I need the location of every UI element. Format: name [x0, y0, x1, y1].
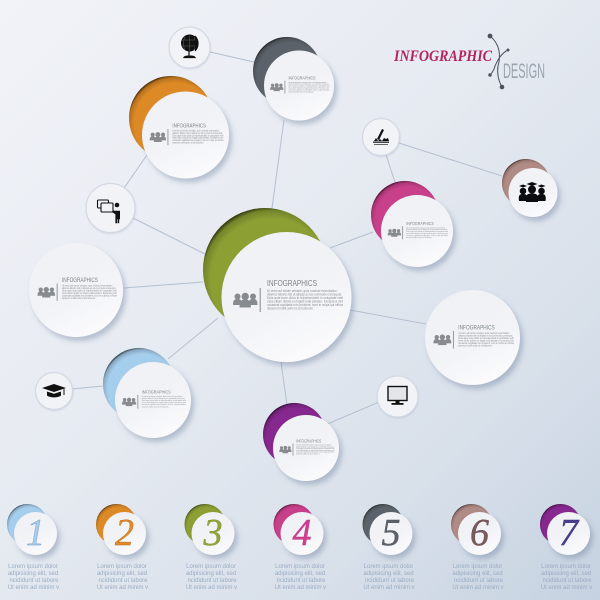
step 1: [7, 504, 59, 591]
panel: grey circle: [253, 37, 334, 120]
step 4: adipisicing elit, sed: [275, 571, 325, 577]
step 7: [540, 504, 592, 591]
panel: right white circle: INFOGRAPHICS: [458, 324, 495, 331]
icon: globe: [169, 27, 210, 68]
panel: orange circle: INFOGRAPHICS: [172, 124, 206, 130]
title: infographic design: INFOGRAPHIC: [393, 48, 493, 65]
icon: graduation cap: [36, 372, 72, 410]
panel: pink circle: occaecat cupidatat non proident, sunt in culpa qui officia: [406, 234, 448, 237]
panel: purple circle: INFOGRAPHICS: [296, 438, 321, 444]
panel: grey circle: deserunt mollit anim id est laborum.: [288, 90, 314, 93]
step 2: [96, 504, 148, 591]
panel: green centre circle: [203, 208, 352, 362]
panel: orange circle: deserunt mollit anim id est laborum.: [172, 141, 204, 144]
step 6: Ut enim ad minim v: [452, 585, 504, 591]
icon: presenter with slides: [86, 184, 135, 232]
panel: green centre circle: deserunt mollit anim id est laborum.: [267, 306, 314, 310]
icon: pen and chart: [362, 118, 400, 156]
step 2: Lorem ipsum dolor: [97, 564, 147, 570]
panel: left white circle: Ut enim ad minim veniam, quis nostrud exercitation: [62, 284, 113, 287]
step 3: adipisicing elit, sed: [186, 571, 236, 577]
panel: purple circle: [263, 403, 339, 481]
panel: blue circle: deserunt mollit anim id est laborum.: [142, 405, 169, 408]
title: infographic design: DESIGN: [503, 60, 545, 83]
panel: blue circle: occaecat cupidatat non proident, sunt in culpa qui officia: [142, 403, 187, 406]
step 3: ncididunt ut labore: [187, 578, 237, 584]
step 7: ncididunt ut labore: [542, 578, 592, 584]
panel: orange circle: ullamco laboris nisi ut aliquip ex ea commodo consequat.: [172, 132, 223, 135]
panel: blue circle: INFOGRAPHICS: [142, 390, 171, 396]
panel: purple circle: esse cillum dolore eu fugiat nulla pariatur. Excepteur sint: [296, 449, 335, 452]
step 7: Lorem ipsum dolor: [541, 564, 591, 570]
panel: right white circle: ullamco laboris nisi ut aliquip ex ea commodo consequat.: [458, 334, 513, 337]
step 1: 1: [26, 512, 45, 554]
step 7: Ut enim ad minim v: [541, 585, 592, 591]
panel: purple circle: Ut enim ad minim veniam, quis nostrud exercitation: [296, 444, 331, 446]
step 5: Lorem ipsum dolor: [364, 564, 413, 570]
step 3: 3: [202, 512, 222, 554]
panel: grey circle: INFOGRAPHICS: [288, 76, 315, 81]
panel: green centre circle: occaecat cupidatat non proident, sunt in culpa qui officia: [267, 303, 343, 307]
panel: green centre circle: esse cillum dolore eu fugiat nulla pariatur. Excepteur sint: [267, 300, 343, 304]
panel: grey circle: esse cillum dolore eu fugiat nulla pariatur. Excepteur sint: [288, 86, 330, 89]
panel: pink circle: INFOGRAPHICS: [406, 221, 434, 227]
panel: grey circle: Duis aute irure dolor in reprehenderit in voluptate velit: [288, 85, 330, 88]
panel: left white circle: Duis aute irure dolor in reprehenderit in voluptate velit: [62, 289, 117, 292]
step 5: [362, 504, 415, 591]
step 7: 7: [559, 512, 580, 554]
step 7: adipisicing elit, sed: [541, 571, 591, 577]
panel: purple circle: Duis aute irure dolor in reprehenderit in voluptate velit: [296, 447, 335, 450]
step 6: adipisicing elit, sed: [452, 571, 503, 577]
panel: pink circle: deserunt mollit anim id est laborum.: [406, 236, 433, 239]
panel: grey circle: occaecat cupidatat non proident, sunt in culpa qui officia: [288, 88, 330, 91]
panel: left white circle: deserunt mollit anim id est laborum.: [62, 297, 96, 300]
step 2: 2: [115, 512, 134, 554]
panel: left white circle: occaecat cupidatat non proident, sunt in culpa qui officia: [62, 294, 117, 297]
step 1: Lorem ipsum dolor: [8, 564, 58, 570]
step 5: adipisicing elit, sed: [363, 571, 414, 577]
step 5: Ut enim ad minim v: [363, 585, 415, 591]
step 2: Ut enim ad minim v: [97, 585, 148, 591]
panel: blue circle: esse cillum dolore eu fugiat nulla pariatur. Excepteur sint: [142, 401, 186, 404]
step 6: 6: [470, 512, 489, 554]
connector lines: [72, 52, 502, 425]
panel: right white circle: esse cillum dolore eu fugiat nulla pariatur. Excepteur sint: [458, 340, 514, 343]
panel: orange circle: Duis aute irure dolor in reprehenderit in voluptate velit: [172, 134, 224, 137]
panel: blue circle: Duis aute irure dolor in reprehenderit in voluptate velit: [142, 399, 186, 402]
panel: pink circle: Ut enim ad minim veniam, quis nostrud exercitation: [406, 226, 445, 229]
step 6: [451, 504, 504, 591]
panel: pink circle: [371, 181, 453, 267]
step 3: [184, 504, 237, 591]
panel: right white circle: Ut enim ad minim veniam, quis nostrud exercitation: [458, 332, 510, 335]
panel: blue circle: ullamco laboris nisi ut aliquip ex ea commodo consequat.: [142, 397, 186, 400]
panel: orange circle: Ut enim ad minim veniam, quis nostrud exercitation: [172, 130, 220, 133]
step 5: 5: [382, 512, 400, 554]
step 4: ncididunt ut labore: [276, 578, 326, 584]
panel: orange circle: occaecat cupidatat non proident, sunt in culpa qui officia: [172, 139, 224, 142]
panel: green centre circle: Duis aute irure dolor in reprehenderit in voluptate velit: [267, 296, 343, 300]
step 2: ncididunt ut labore: [98, 578, 148, 584]
panel: pink circle: Duis aute irure dolor in reprehenderit in voluptate velit: [406, 230, 449, 233]
step 1: ncididunt ut labore: [9, 578, 59, 584]
step 1: Ut enim ad minim v: [8, 585, 59, 591]
panel: orange circle: [129, 76, 229, 178]
panel: left white circle: ullamco laboris nisi ut aliquip ex ea commodo consequat.: [62, 287, 116, 290]
step 6: ncididunt ut labore: [454, 578, 504, 584]
step 1: adipisicing elit, sed: [8, 571, 58, 577]
icon: monitor: [377, 376, 418, 417]
step 2: adipisicing elit, sed: [97, 571, 147, 577]
panel: right white circle: deserunt mollit anim id est laborum.: [458, 345, 493, 348]
panel: left white circle: [29, 243, 123, 337]
panel: orange circle: esse cillum dolore eu fugiat nulla pariatur. Excepteur sint: [172, 137, 224, 140]
panel: green centre circle: INFOGRAPHICS: [267, 278, 317, 288]
panel: blue circle: Ut enim ad minim veniam, quis nostrud exercitation: [142, 395, 182, 398]
step 4: 4: [292, 512, 312, 554]
step 3: Ut enim ad minim v: [186, 585, 237, 591]
step 6: Lorem ipsum dolor: [453, 564, 502, 570]
panel: green centre circle: ullamco laboris nisi ut aliquip ex ea commodo consequat.: [267, 292, 342, 296]
panel: grey circle: ullamco laboris nisi ut aliquip ex ea commodo consequat.: [288, 83, 329, 86]
step 4: Ut enim ad minim v: [275, 585, 326, 591]
panel: green centre circle: Ut enim ad minim veniam, quis nostrud exercitation: [267, 289, 337, 293]
panel: left white circle: INFOGRAPHICS: [62, 277, 98, 284]
step 5: ncididunt ut labore: [365, 578, 415, 584]
panel: right white circle: Duis aute irure dolor in reprehenderit in voluptate velit: [458, 337, 514, 340]
panel: right white circle: occaecat cupidatat non proident, sunt in culpa qui officia: [458, 342, 514, 345]
panel: right white circle: [425, 290, 520, 385]
panel: blue circle: [103, 348, 191, 438]
panel: purple circle: ullamco laboris nisi ut aliquip ex ea commodo consequat.: [296, 445, 334, 448]
step 4: [274, 504, 326, 591]
step 3: Lorem ipsum dolor: [186, 564, 236, 570]
panel: purple circle: occaecat cupidatat non proident, sunt in culpa qui officia: [296, 450, 334, 454]
panel: purple circle: deserunt mollit anim id est laborum.: [296, 452, 320, 455]
panel: brown circle with graduates icon: [502, 159, 558, 217]
panel: pink circle: ullamco laboris nisi ut aliquip ex ea commodo consequat.: [406, 228, 448, 231]
title: infographic design: [393, 34, 545, 89]
step 4: Lorem ipsum dolor: [275, 564, 325, 570]
panel: grey circle: Ut enim ad minim veniam, quis nostrud exercitation: [288, 81, 326, 84]
panel: pink circle: esse cillum dolore eu fugiat nulla pariatur. Excepteur sint: [406, 232, 449, 235]
panel: left white circle: esse cillum dolore eu fugiat nulla pariatur. Excepteur sint: [62, 292, 117, 295]
icon: graduates: [519, 182, 546, 202]
